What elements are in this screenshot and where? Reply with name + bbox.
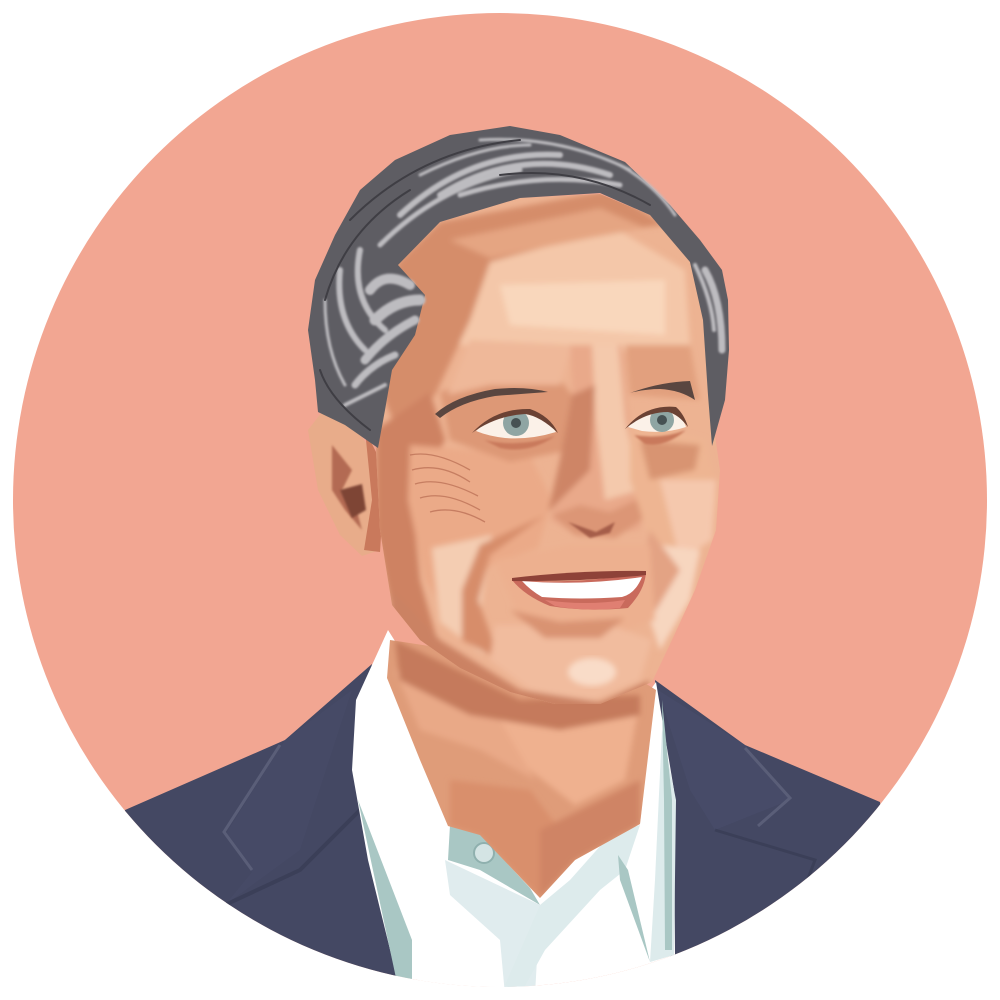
right eye (625, 407, 688, 445)
jaw shadow (396, 610, 651, 704)
hair highlights (325, 139, 722, 405)
right eyebrow (630, 381, 695, 400)
chin (490, 625, 652, 702)
mouth area (643, 552, 656, 622)
ear (308, 412, 385, 556)
wrinkles (410, 454, 485, 522)
eye socket (440, 382, 573, 462)
nasolabial (459, 520, 535, 656)
neck (387, 640, 656, 898)
left eye (472, 409, 558, 450)
mouth (512, 571, 646, 610)
left face shadow (376, 392, 445, 650)
head (376, 194, 720, 704)
hair (308, 126, 729, 448)
forehead (460, 225, 690, 355)
left eyebrow (435, 388, 548, 418)
right face (628, 458, 644, 510)
shirt (352, 630, 676, 995)
jacket lapel right (743, 744, 746, 746)
jacket (100, 664, 900, 990)
nose (557, 344, 632, 510)
left cheek (406, 443, 548, 583)
shirt button (474, 843, 494, 863)
jacket lapel left (226, 739, 286, 904)
collar shadow (448, 825, 540, 905)
